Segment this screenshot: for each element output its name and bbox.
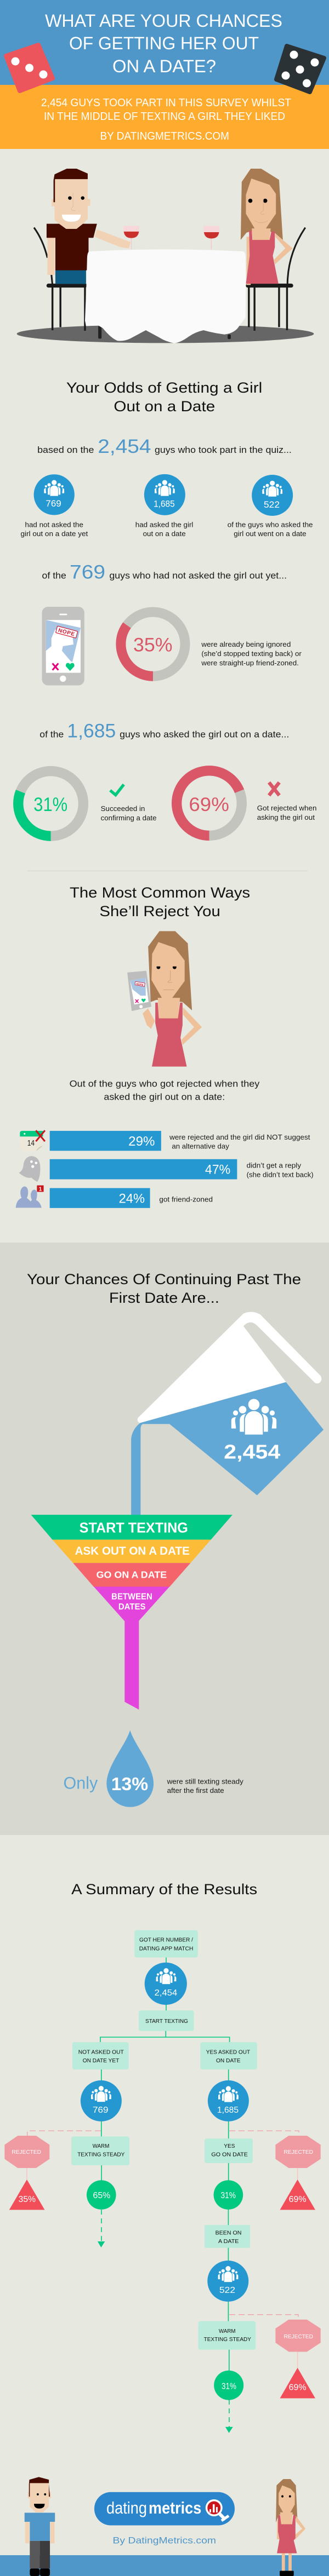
box: warm texting steady 2 bbox=[198, 2321, 256, 2350]
circle: 31% lower: 31% bbox=[222, 2382, 236, 2391]
right chair bbox=[247, 228, 305, 331]
box: not asked out: NOT ASKED OUT bbox=[78, 2049, 124, 2056]
stat bubble: 522 bbox=[228, 475, 313, 538]
footer logo: datingmetrics: metrics bbox=[149, 2498, 201, 2517]
heading: most common ways: The Most Common Ways bbox=[70, 884, 250, 901]
donut chart: 69% bbox=[177, 771, 242, 836]
caption: ignored or friend-zoned: (she’d stopped texting back) or bbox=[201, 650, 302, 658]
title: OF GETTING HER OUT bbox=[69, 33, 259, 53]
footer logo: datingmetrics bbox=[94, 2492, 235, 2526]
bar: 24%: 24% bbox=[119, 1191, 145, 1206]
caption: still texting: after the first date bbox=[167, 1787, 224, 1795]
funnel: BETWEEN bbox=[111, 1591, 152, 1601]
section: rejection ways bbox=[16, 931, 314, 1208]
box: been on a date: A DATE bbox=[218, 2238, 239, 2245]
box: yes go on date: GO ON DATE bbox=[211, 2151, 248, 2158]
stat bubble: 769 bbox=[20, 474, 88, 538]
circle: 31% bbox=[214, 2180, 243, 2210]
box: yes go on date bbox=[205, 2138, 253, 2163]
heading: your chances bbox=[27, 1271, 301, 1306]
triangle: 69% bbox=[280, 2180, 315, 2210]
donut chart: 35% bbox=[121, 612, 185, 676]
icon: ghost bbox=[19, 1156, 40, 1182]
people icon: 2,454 bbox=[224, 1399, 281, 1463]
circle: 1,685: 1,685 bbox=[217, 2106, 239, 2115]
triangle: 69% lower bbox=[280, 2368, 315, 2399]
droplet: 13%: 13% bbox=[111, 1774, 148, 1795]
circle: 769 bbox=[81, 2080, 122, 2121]
stat bubble: 522: girl out went on a date bbox=[234, 530, 307, 538]
sentence: based on 2,454 guys: based on the bbox=[37, 445, 94, 455]
sentence: of the 1,685 guys: guys who asked the girl out on a date... bbox=[120, 729, 289, 739]
caption: rejected: Got rejected when bbox=[257, 804, 316, 812]
flowchart: summary of the results bbox=[4, 1930, 321, 2433]
wine glass left bbox=[123, 226, 139, 249]
droplet: 13% bbox=[106, 1730, 154, 1807]
icon: red x bbox=[269, 783, 279, 795]
heading: your odds: Out on a Date bbox=[114, 398, 215, 415]
box: warm texting steady 2: WARM bbox=[219, 2328, 236, 2334]
survey text bbox=[41, 96, 291, 142]
sentence: of the 769 guys: 769 bbox=[70, 561, 105, 583]
circle: 522: 522 bbox=[219, 2286, 235, 2295]
caption: rejected: asking the girl out bbox=[257, 814, 315, 821]
triangle: 69% lower: 69% bbox=[289, 2383, 307, 2393]
box: warm texting steady bbox=[71, 2136, 129, 2165]
box: yes go on date: YES bbox=[224, 2143, 235, 2149]
circle: 1,685 bbox=[208, 2080, 249, 2121]
table legs bbox=[98, 326, 231, 339]
triangle: 35% bbox=[9, 2180, 44, 2210]
section: drop result and summary heading bbox=[64, 1730, 257, 1898]
caption: friend-zoned: got friend-zoned bbox=[159, 1195, 213, 1203]
box: got her number: DATING APP MATCH bbox=[139, 1945, 193, 1952]
phone in hand bbox=[128, 971, 151, 1010]
stat bubble: 769: girl out on a date yet bbox=[20, 530, 88, 538]
bar: 29%: 29% bbox=[128, 1134, 155, 1149]
icon: cancelled calendar: 14 bbox=[27, 1139, 35, 1148]
pitcher pouring into funnel bbox=[131, 1312, 324, 1516]
label: only: Only bbox=[64, 1773, 98, 1792]
sentence: of the 769 guys: of the bbox=[42, 571, 66, 580]
stop sign: rejected left: REJECTED bbox=[12, 2149, 41, 2155]
icon: red die bbox=[6, 45, 53, 91]
circle: 522 bbox=[207, 2261, 248, 2302]
box: been on a date bbox=[205, 2225, 250, 2248]
caption: no alternative day: were rejected and the girl did NOT suggest bbox=[169, 1134, 310, 1141]
stat bubble: 522: 522 bbox=[264, 500, 280, 510]
ground shadow bbox=[17, 325, 314, 343]
caption: ignored or friend-zoned: were already being ignored bbox=[201, 641, 291, 648]
sentence: of the 1,685 guys bbox=[39, 720, 289, 741]
heading: summary: A Summary of the Results bbox=[71, 1881, 257, 1898]
title: ON A DATE? bbox=[112, 56, 216, 76]
stat bubble: 1,685: 1,685 bbox=[154, 499, 175, 509]
stop sign: rejected lower: REJECTED bbox=[284, 2333, 313, 2340]
icon: phone with dating app: NOPE bbox=[58, 628, 76, 638]
circle: 2,454: 2,454 bbox=[155, 1988, 177, 1998]
box: got her number: GOT HER NUMBER / bbox=[139, 1937, 193, 1944]
heading: most common ways bbox=[70, 884, 250, 919]
title: WHAT ARE YOUR CHANCES bbox=[45, 11, 282, 31]
box: not asked out: ON DATE YET bbox=[83, 2057, 120, 2064]
stat bubble: 1,685: out on a date bbox=[143, 530, 186, 538]
donut chart: 35%: 35% bbox=[133, 635, 173, 656]
arrow: right branch continues bbox=[225, 2427, 233, 2433]
stat bubble: 769: 769 bbox=[46, 499, 61, 509]
sentence: based on 2,454 guys: 2,454 bbox=[98, 436, 151, 457]
stat bubble: 1,685 bbox=[135, 474, 193, 538]
caption: succeeded: confirming a date bbox=[101, 814, 156, 822]
illustration: standing man bbox=[25, 2477, 55, 2576]
triangle: 35%: 35% bbox=[19, 2195, 36, 2204]
circle: 65%: 65% bbox=[93, 2191, 111, 2200]
caption: ignored or friend-zoned bbox=[201, 641, 302, 667]
funnel: DATES bbox=[118, 1602, 146, 1612]
stop sign: rejected lower bbox=[275, 2320, 321, 2351]
title bbox=[45, 11, 282, 76]
sentence: based on 2,454 guys: guys who took part in the quiz... bbox=[155, 445, 292, 455]
caption: rejected bbox=[257, 804, 316, 821]
stat bubble: 1,685: had asked the girl bbox=[135, 521, 193, 528]
box: warm texting steady 2: TEXTING STEADY bbox=[204, 2336, 251, 2343]
heading: your odds: Your Odds of Getting a Girl bbox=[66, 380, 262, 396]
box: yes asked out: YES ASKED OUT bbox=[206, 2049, 251, 2056]
box: got her number bbox=[134, 1930, 198, 1958]
icon: friend request bbox=[16, 1186, 44, 1208]
caption: ignored or friend-zoned: were straight-up friend-zoned. bbox=[201, 659, 299, 667]
sentence: of the 769 guys bbox=[42, 561, 287, 583]
tablecloth bbox=[85, 249, 246, 343]
footer logo: datingmetrics: dating bbox=[106, 2498, 147, 2517]
woman bbox=[241, 169, 293, 285]
circle: 31% lower bbox=[214, 2371, 243, 2400]
funnel: GO ON A DATE bbox=[97, 1569, 167, 1580]
donut chart: 31%: 31% bbox=[33, 794, 67, 815]
circle: 2,454 bbox=[145, 1963, 187, 2005]
caption: no reply: (she didn’t text back) bbox=[247, 1171, 314, 1178]
heading: your chances: Your Chances Of Continuing Past The bbox=[27, 1271, 301, 1287]
phone in hand: NOPE bbox=[136, 982, 144, 986]
people icon: 2,454: 2,454 bbox=[224, 1441, 281, 1463]
illustration: couple on a date at a table bbox=[17, 169, 314, 343]
illustration: standing woman bbox=[276, 2479, 305, 2576]
box: been on a date: BEEN ON bbox=[215, 2230, 241, 2236]
stat bubble: 522: of the guys who asked the bbox=[228, 521, 313, 528]
stat bubble: 769: had not asked the bbox=[25, 521, 83, 528]
survey text: BY DATINGMETRICS.COM bbox=[100, 130, 229, 142]
donut chart: 69%: 69% bbox=[189, 794, 229, 815]
sentence: out of the guys who got rejected: asked the girl out on a date: bbox=[104, 1092, 225, 1102]
header: blue title banner bbox=[0, 0, 329, 85]
caption: no alternative day bbox=[169, 1134, 310, 1151]
connectors bbox=[100, 1957, 230, 2427]
stop sign: rejected left bbox=[4, 2136, 49, 2168]
icon: phone with dating app bbox=[42, 607, 84, 686]
bar: 47%: 47% bbox=[205, 1163, 230, 1177]
stop sign: rejected right: REJECTED bbox=[284, 2149, 313, 2155]
orange survey banner bbox=[0, 85, 329, 149]
stop sign: rejected right bbox=[275, 2136, 321, 2168]
survey text: 2,454 GUYS TOOK PART IN THIS SURVEY WHILST bbox=[41, 96, 291, 109]
circle: 31%: 31% bbox=[220, 2191, 236, 2200]
box: start texting bbox=[139, 2010, 194, 2031]
heading: your chances: First Date Are... bbox=[109, 1290, 219, 1306]
caption: still texting: were still texting steady bbox=[167, 1778, 244, 1785]
icon: magnifier with chart bbox=[206, 2499, 229, 2521]
funnel bbox=[31, 1515, 232, 1710]
footer credit: By DatingMetrics.com bbox=[113, 2535, 216, 2545]
section: guys who asked bbox=[18, 720, 316, 919]
donut chart: 31% bbox=[18, 771, 83, 836]
caption: still texting bbox=[167, 1778, 244, 1795]
caption: succeeded: Succeeded in bbox=[101, 805, 145, 813]
caption: no alternative day: an alternative day bbox=[172, 1143, 230, 1151]
bar: 47% bbox=[50, 1159, 237, 1179]
caption: succeeded bbox=[101, 805, 156, 822]
footer band bbox=[0, 2555, 329, 2576]
triangle: 69%: 69% bbox=[289, 2195, 307, 2204]
funnel: START TEXTING bbox=[80, 1520, 188, 1536]
caption: no reply bbox=[247, 1162, 314, 1178]
icon: black die bbox=[276, 46, 324, 92]
caption: no reply: didn’t get a reply bbox=[247, 1162, 302, 1169]
sentence: of the 1,685 guys: of the bbox=[39, 729, 64, 739]
box: yes asked out bbox=[200, 2042, 257, 2069]
survey text: IN THE MIDDLE OF TEXTING A GIRL THEY LIKED bbox=[44, 110, 285, 123]
box: yes asked out: ON DATE bbox=[216, 2057, 240, 2064]
bar: 24% bbox=[50, 1188, 150, 1208]
heading: your odds bbox=[66, 380, 262, 415]
bar: 29% bbox=[50, 1131, 161, 1151]
section: odds of getting a girl out bbox=[20, 380, 313, 686]
left chair bbox=[34, 228, 86, 331]
icon: friend request: 1 bbox=[39, 1187, 42, 1193]
rejection connectors bbox=[27, 2131, 299, 2368]
illustration: woman with phone bbox=[128, 931, 202, 1067]
box: warm texting steady: TEXTING STEADY bbox=[77, 2151, 124, 2158]
sentence: out of the guys who got rejected bbox=[70, 1079, 260, 1102]
sentence: of the 769 guys: guys who had not asked the girl out yet... bbox=[109, 571, 287, 580]
arrow: left branch continues bbox=[98, 2241, 105, 2247]
icon: cancelled calendar bbox=[20, 1130, 45, 1151]
sentence: based on 2,454 guys bbox=[37, 436, 292, 457]
icon: green check bbox=[110, 785, 124, 795]
section: past the first date bbox=[27, 1271, 324, 1710]
circle: 65% bbox=[87, 2180, 116, 2210]
heading: most common ways: She’ll Reject You bbox=[99, 903, 220, 919]
box: warm texting steady: WARM bbox=[93, 2143, 109, 2149]
funnel: ASK OUT ON A DATE bbox=[75, 1545, 190, 1557]
sentence: of the 1,685 guys: 1,685 bbox=[67, 720, 116, 741]
box: start texting: START TEXTING bbox=[145, 2018, 188, 2025]
man bbox=[47, 169, 131, 284]
box: not asked out bbox=[72, 2042, 129, 2069]
circle: 769: 769 bbox=[93, 2106, 109, 2115]
sentence: out of the guys who got rejected: Out of the guys who got rejected when they bbox=[70, 1079, 260, 1089]
wine glass right bbox=[203, 226, 219, 249]
